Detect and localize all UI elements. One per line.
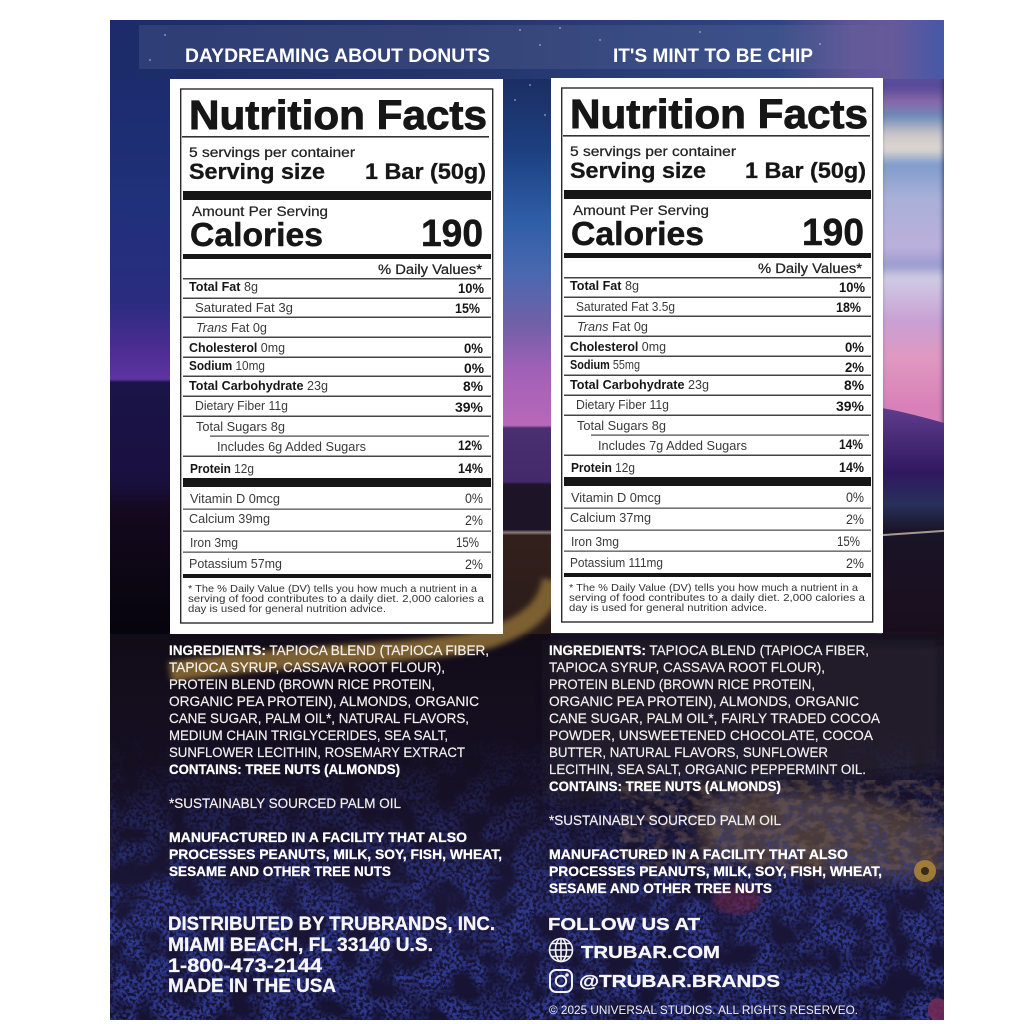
text block: ingredients mint chip bbox=[549, 642, 881, 794]
nutrient table: 0% bbox=[464, 341, 483, 356]
icon: globe bbox=[550, 938, 572, 962]
nutrient table bbox=[564, 261, 871, 475]
title: nutrition facts: Nutrition Facts bbox=[189, 92, 487, 138]
footnote: day is used for general nutrition advice. bbox=[188, 603, 386, 615]
footnote: * The % Daily Value (DV) tells you how much a nutrient in a bbox=[569, 582, 858, 594]
vitamins and minerals bbox=[183, 478, 491, 578]
heading: it's mint to be chip: IT'S MINT TO BE CHIP bbox=[613, 45, 813, 67]
text block: palm oil note mint chip: *SUSTAINABLY SOURCED PALM OIL bbox=[549, 812, 781, 828]
calories block: Amount Per Serving bbox=[573, 202, 709, 218]
text block: ingredients mint chip: CONTAINS: TREE NUTS (ALMONDS) bbox=[549, 778, 781, 794]
servings block: 1 Bar (50g) bbox=[745, 158, 866, 183]
nutrient table: 14% bbox=[839, 437, 863, 452]
text block: ingredients mint chip: TAPIOCA SYRUP, CASSAVA ROOT FLOUR), bbox=[549, 659, 825, 675]
nutrient table: 8% bbox=[844, 378, 864, 393]
servings block: Serving size bbox=[570, 158, 706, 183]
vitamins and minerals: 15% bbox=[456, 535, 479, 550]
panel: nutrition facts donuts bbox=[170, 79, 503, 634]
vitamins and minerals: 2% bbox=[465, 513, 483, 528]
calories block: Calories bbox=[571, 215, 704, 252]
nutrient table: 12% bbox=[458, 438, 482, 453]
text block: ingredients mint chip: POWDER, UNSWEETENED CHOCOLATE, COCOA bbox=[549, 727, 874, 743]
servings block: 1 Bar (50g) bbox=[365, 159, 486, 184]
text block: allergen facility donuts: PROCESSES PEANUTS, MILK, SOY, FISH, WHEAT, bbox=[169, 846, 502, 862]
nutrient table: 0% bbox=[845, 340, 864, 355]
text block: follow us: FOLLOW US AT bbox=[548, 914, 700, 934]
calories block bbox=[564, 202, 871, 258]
nutrient table: Cholesterol 0mg bbox=[570, 340, 666, 354]
vitamins and minerals: Iron 3mg bbox=[571, 535, 619, 549]
calories block bbox=[183, 203, 491, 259]
nutrient table: Sodium 10mg bbox=[189, 359, 265, 373]
vitamins and minerals: 0% bbox=[465, 491, 483, 506]
nutrient table: Cholesterol 0mg bbox=[189, 341, 285, 355]
website: TRUBAR.COM bbox=[581, 942, 720, 962]
footnote bbox=[188, 583, 484, 615]
servings block bbox=[182, 136, 491, 200]
text block: distributor: DISTRIBUTED BY TRUBRANDS, INC. bbox=[168, 914, 495, 935]
text block: allergen facility donuts bbox=[169, 829, 502, 879]
text block: allergen facility mint chip bbox=[549, 846, 882, 896]
text block: allergen facility mint chip: MANUFACTURED IN A FACILITY THAT ALSO bbox=[549, 846, 848, 862]
calories block: Calories bbox=[190, 216, 323, 253]
vitamins and minerals bbox=[564, 477, 871, 577]
calories block: 190 bbox=[802, 212, 864, 254]
text block: palm oil note donuts: *SUSTAINABLY SOURCED PALM OIL bbox=[169, 795, 401, 811]
text block: allergen facility mint chip: SESAME AND OTHER TREE NUTS bbox=[549, 880, 772, 896]
vitamins and minerals: 15% bbox=[837, 534, 860, 549]
heading: daydreaming about donuts: DAYDREAMING ABOUT DONUTS bbox=[185, 45, 490, 67]
nutrient table: % Daily Values* bbox=[378, 262, 483, 277]
nutrient table: 14% bbox=[458, 461, 483, 476]
text block: ingredients mint chip: ORGANIC PEA PROTEIN), ALMONDS, ORGANIC bbox=[549, 693, 859, 709]
text block: distributor bbox=[168, 914, 495, 997]
footnote bbox=[569, 582, 865, 614]
text block: ingredients donuts: CONTAINS: TREE NUTS (ALMONDS) bbox=[169, 761, 400, 777]
nutrient table: 0% bbox=[464, 361, 484, 376]
vitamins and minerals: Vitamin D 0mcg bbox=[190, 492, 280, 506]
vitamins and minerals: 2% bbox=[846, 512, 864, 527]
servings block: 5 servings per container bbox=[189, 145, 356, 160]
copyright: © 2025 UNIVERSAL STUDIOS. ALL RIGHTS RESERVEO. bbox=[549, 1003, 858, 1017]
nutrient table bbox=[183, 262, 491, 476]
footnote: * The % Daily Value (DV) tells you how much a nutrient in a bbox=[188, 583, 477, 595]
footnote: day is used for general nutrition advice. bbox=[569, 602, 767, 614]
text block: ingredients mint chip: BUTTER, NATURAL FLAVORS, SUNFLOWER bbox=[549, 744, 828, 760]
nutrient table: Sodium 55mg bbox=[570, 358, 640, 372]
nutrient table: Dietary Fiber 11g bbox=[195, 399, 288, 413]
nutrient table: 10% bbox=[458, 281, 484, 296]
nutrient table: Total Fat 8g bbox=[189, 280, 258, 294]
servings block: 5 servings per container bbox=[570, 144, 737, 159]
calories block: 190 bbox=[421, 213, 483, 255]
text block: ingredients mint chip: PROTEIN BLEND (BROWN RICE PROTEIN, bbox=[549, 676, 815, 692]
nutrient table: % Daily Values* bbox=[758, 261, 863, 276]
nutrient table: 18% bbox=[836, 300, 861, 315]
text block: distributor: 1-800-473-2144 bbox=[168, 956, 322, 977]
text block: ingredients mint chip: LECITHIN, SEA SALT, ORGANIC PEPPERMINT OIL. bbox=[549, 761, 866, 777]
servings block: Serving size bbox=[189, 159, 325, 184]
text block: ingredients donuts: CANE SUGAR, PALM OIL*, NATURAL FLAVORS, bbox=[169, 710, 469, 726]
vitamins and minerals: Calcium 37mg bbox=[570, 511, 651, 525]
vitamins and minerals: Potassium 57mg bbox=[189, 557, 282, 571]
text block: ingredients donuts: TAPIOCA SYRUP, CASSAVA ROOT FLOUR), bbox=[169, 659, 445, 675]
nutrient table: 14% bbox=[839, 460, 864, 475]
text block: allergen facility donuts: MANUFACTURED IN A FACILITY THAT ALSO bbox=[169, 829, 467, 845]
text block: distributor: MADE IN THE USA bbox=[168, 976, 336, 997]
footnote: serving of food contributes to a daily diet. 2,000 calories a bbox=[569, 592, 865, 604]
nutrient table: Total Carbohydrate 23g bbox=[570, 378, 709, 392]
nutrient table: Total Sugars 8g bbox=[577, 419, 666, 433]
nutrient table: Dietary Fiber 11g bbox=[576, 398, 669, 412]
text block: ingredients donuts bbox=[169, 642, 489, 777]
nutrient table: Includes 7g Added Sugars bbox=[598, 439, 747, 453]
text block: allergen facility donuts: SESAME AND OTHER TREE NUTS bbox=[169, 863, 391, 879]
vitamins and minerals: Iron 3mg bbox=[190, 536, 238, 550]
text block: ingredients donuts: INGREDIENTS: TAPIOCA BLEND (TAPIOCA FIBER, bbox=[169, 642, 489, 658]
text block: ingredients donuts: ORGANIC PEA PROTEIN), ALMONDS, ORGANIC bbox=[169, 693, 479, 709]
vitamins and minerals: 2% bbox=[846, 556, 864, 571]
text block: ingredients mint chip: INGREDIENTS: TAPIOCA BLEND (TAPIOCA FIBER, bbox=[549, 642, 869, 658]
text block: distributor: MIAMI BEACH, FL 33140 U.S. bbox=[168, 935, 433, 956]
text block: ingredients donuts: SUNFLOWER LECITHIN, ROSEMARY EXTRACT bbox=[169, 744, 465, 760]
nutrient table: Trans Fat 0g bbox=[196, 321, 267, 335]
vitamins and minerals: Potassium 111mg bbox=[570, 556, 663, 570]
text block: ingredients donuts: MEDIUM CHAIN TRIGLYCERIDES, SEA SALT, bbox=[169, 727, 448, 743]
nutrient table: 39% bbox=[455, 400, 483, 415]
icon: instagram bbox=[550, 970, 572, 992]
vitamins and minerals: 0% bbox=[846, 490, 864, 505]
vitamins and minerals: 2% bbox=[465, 557, 483, 572]
servings block bbox=[563, 135, 871, 199]
nutrient table: 2% bbox=[845, 360, 864, 375]
text block: ingredients donuts: PROTEIN BLEND (BROWN RICE PROTEIN, bbox=[169, 676, 435, 692]
text block: ingredients mint chip: CANE SUGAR, PALM OIL*, FAIRLY TRADED COCOA bbox=[549, 710, 881, 726]
nutrient table: Total Carbohydrate 23g bbox=[189, 379, 328, 393]
nutrient table: 10% bbox=[839, 280, 865, 295]
nutrient table: Protein 12g bbox=[571, 461, 635, 475]
footnote: serving of food contributes to a daily diet. 2,000 calories a bbox=[188, 593, 484, 605]
title: nutrition facts: Nutrition Facts bbox=[570, 91, 868, 137]
nutrient table: Total Sugars 8g bbox=[196, 420, 285, 434]
calories block: Amount Per Serving bbox=[192, 203, 328, 219]
panel: nutrition facts mint chip bbox=[551, 78, 883, 633]
nutrient table: Saturated Fat 3g bbox=[195, 301, 293, 315]
text block: allergen facility mint chip: PROCESSES PEANUTS, MILK, SOY, FISH, WHEAT, bbox=[549, 863, 882, 879]
nutrient table: Saturated Fat 3.5g bbox=[576, 300, 675, 314]
vitamins and minerals: Vitamin D 0mcg bbox=[571, 491, 661, 505]
nutrient table: 39% bbox=[836, 399, 864, 414]
nutrient table: Protein 12g bbox=[190, 462, 254, 476]
instagram handle: @TRUBAR.BRANDS bbox=[579, 971, 780, 991]
nutrient table: 15% bbox=[455, 301, 480, 316]
nutrient table: Includes 6g Added Sugars bbox=[217, 440, 366, 454]
nutrient table: Total Fat 8g bbox=[570, 279, 639, 293]
vitamins and minerals: Calcium 39mg bbox=[189, 512, 270, 526]
nutrient table: Trans Fat 0g bbox=[577, 320, 648, 334]
nutrient table: 8% bbox=[463, 379, 483, 394]
